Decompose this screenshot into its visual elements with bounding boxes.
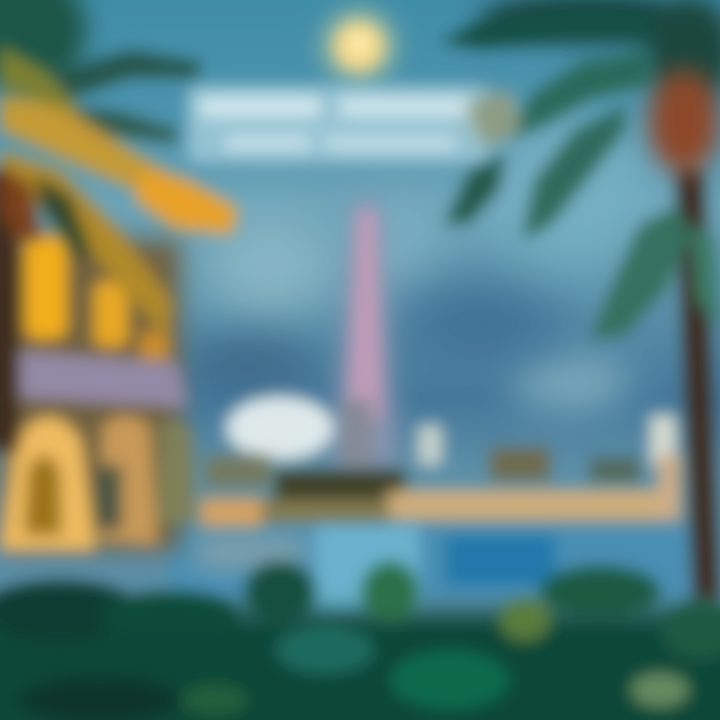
coconut cluster [648, 70, 720, 174]
left building [0, 235, 195, 550]
dark crown [0, 0, 87, 92]
crown [480, 0, 720, 105]
distant buildings [205, 415, 676, 504]
waterfront promenade [200, 455, 680, 532]
lower arches [0, 415, 195, 550]
trunk [0, 170, 18, 450]
upper lit windows [24, 235, 169, 365]
fronds [440, 8, 720, 340]
tower [332, 200, 398, 465]
right palm tree [440, 0, 720, 600]
left palm tree [0, 0, 238, 450]
white dome [226, 396, 334, 460]
water [170, 525, 695, 610]
fronds [0, 45, 238, 340]
moon [323, 10, 395, 82]
title band (illegible in the reference) [188, 86, 510, 162]
lilac cornice [14, 350, 188, 408]
foreground foliage [0, 562, 720, 720]
trunk [676, 170, 720, 600]
